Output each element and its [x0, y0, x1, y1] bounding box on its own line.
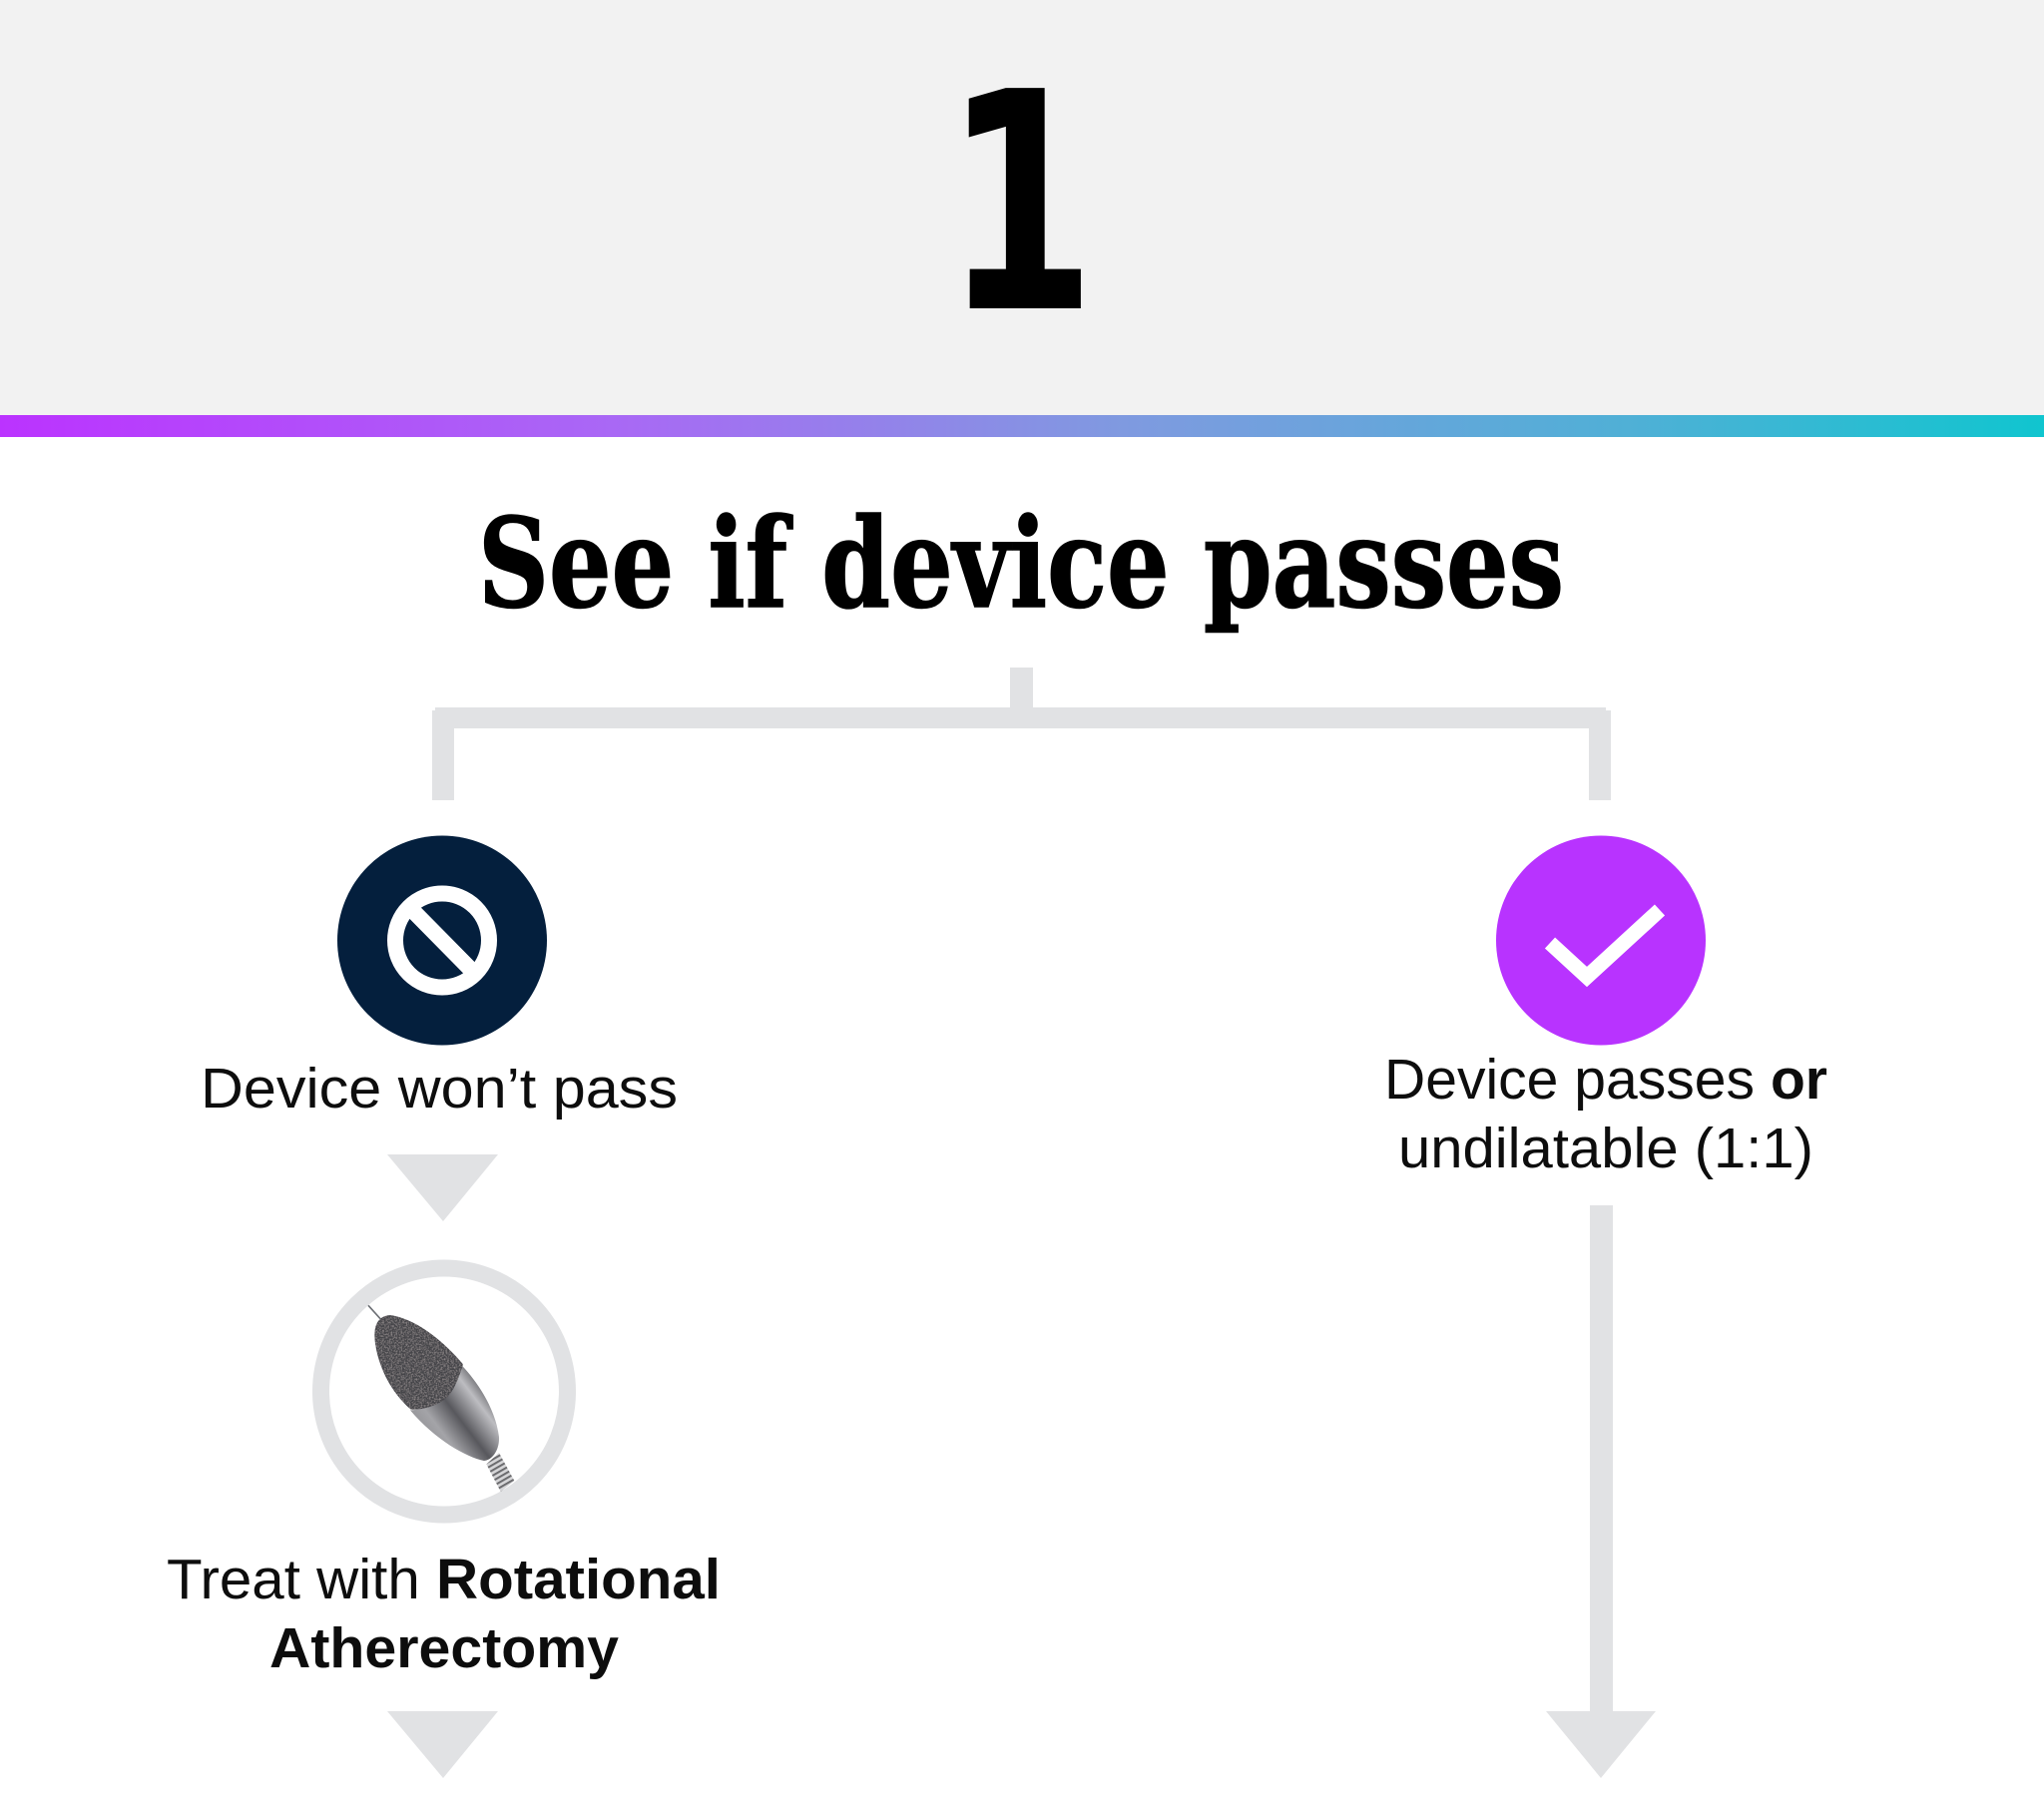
heading: See if device passes: [478, 492, 1564, 637]
label: device passes or undilatable: Device passes or: [1384, 1048, 1827, 1112]
icon: blocked, device won't pass: [337, 836, 547, 1046]
label: treat with rotational atherectomy: Treat with Rotational: [167, 1548, 721, 1611]
silver housing: [410, 1365, 499, 1461]
gradient divider bar: [0, 415, 2044, 437]
label: treat with rotational atherectomy: Atherectomy: [269, 1616, 619, 1680]
arrow: left down 1: [387, 1154, 498, 1221]
label: device passes or undilatable: undilatable (1:1): [1398, 1117, 1813, 1180]
icon: check, device passes: [1496, 836, 1706, 1046]
label: device passes or undilatable: [1384, 1048, 1827, 1180]
branching connector: [432, 668, 1611, 800]
label: treat with rotational atherectomy: [167, 1548, 721, 1680]
burr: [374, 1315, 463, 1410]
label: device won't pass: Device won’t pass: [201, 1057, 678, 1121]
coil shaft: [486, 1453, 514, 1492]
step number: 1: [944, 29, 1096, 380]
guide wire: [368, 1305, 381, 1319]
header band: [0, 0, 2044, 415]
device image in ring: [321, 1268, 567, 1515]
arrow: long right down: [1546, 1205, 1656, 1778]
arrow: left down 2: [387, 1711, 498, 1778]
